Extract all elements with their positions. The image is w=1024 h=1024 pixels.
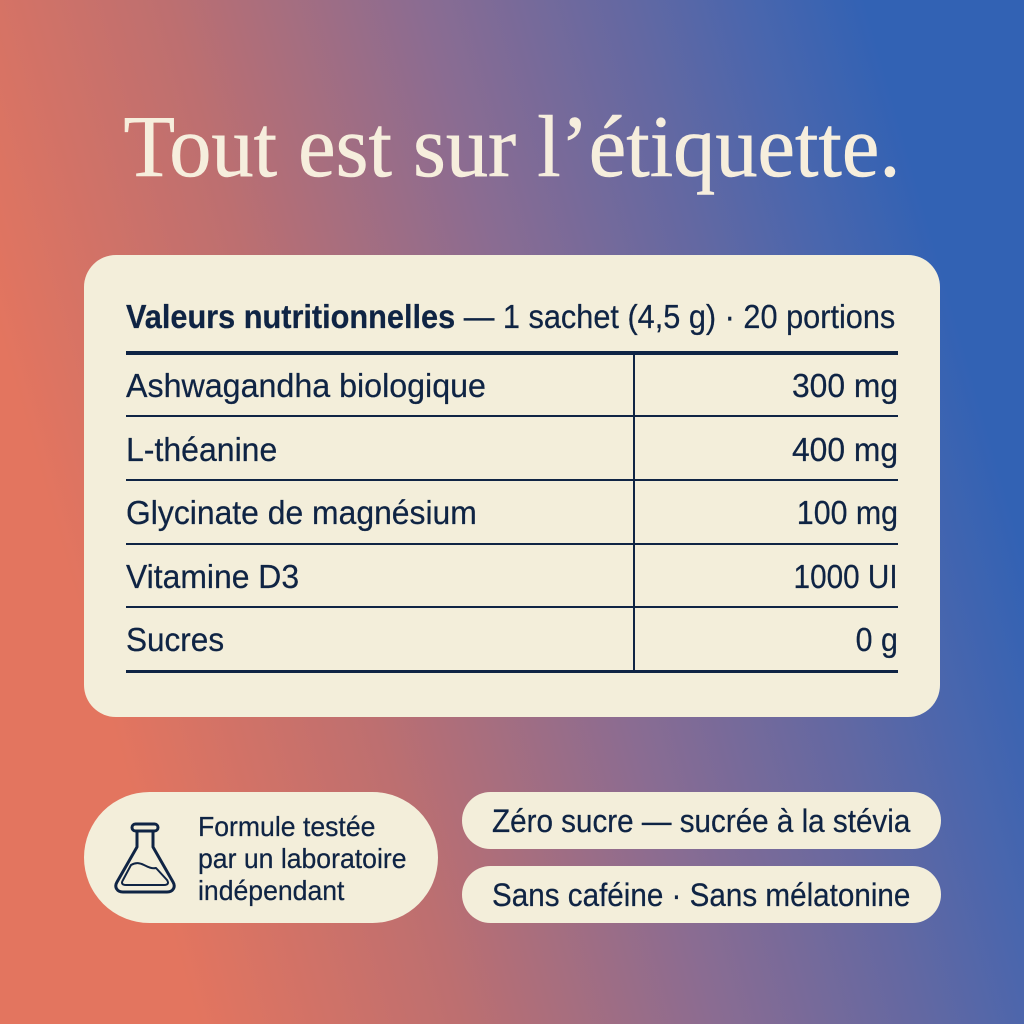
pill text: Sans caféine · Sans mélatonine <box>492 877 910 913</box>
badge text <box>198 811 407 906</box>
icon: flask <box>114 822 176 894</box>
table header: Valeurs nutritionnelles — 1 sachet (4,5 g) · 20 portions <box>126 298 895 335</box>
value: 1000 UI: 1000 UI <box>794 558 898 595</box>
value: 300 mg: 300 mg <box>792 367 898 404</box>
row: L-théanine: L-théanine <box>126 431 277 468</box>
row: Vitamine D3: Vitamine D3 <box>126 558 299 595</box>
title: Tout est sur l’étiquette. <box>124 99 900 196</box>
badge text: par un laboratoire <box>198 843 407 874</box>
badge text: Formule testée <box>198 811 375 842</box>
row: Sucres: Sucres <box>126 621 224 658</box>
value: 400 mg: 400 mg <box>792 431 898 468</box>
pill text: Zéro sucre — sucrée à la stévia <box>492 803 910 839</box>
value: 100 mg: 100 mg <box>797 494 898 531</box>
table <box>126 298 898 673</box>
badge text: indépendant <box>198 875 344 906</box>
panel: nutrition facts <box>84 255 940 717</box>
row: Ashwagandha: Ashwagandha biologique <box>126 367 486 404</box>
pill: zéro sucre <box>462 792 941 849</box>
badge: laboratory tested <box>84 792 438 923</box>
row: Glycinate: Glycinate de magnésium <box>126 494 477 531</box>
pill: sans caféine <box>462 866 941 923</box>
value: 0 g: 0 g <box>856 621 898 658</box>
